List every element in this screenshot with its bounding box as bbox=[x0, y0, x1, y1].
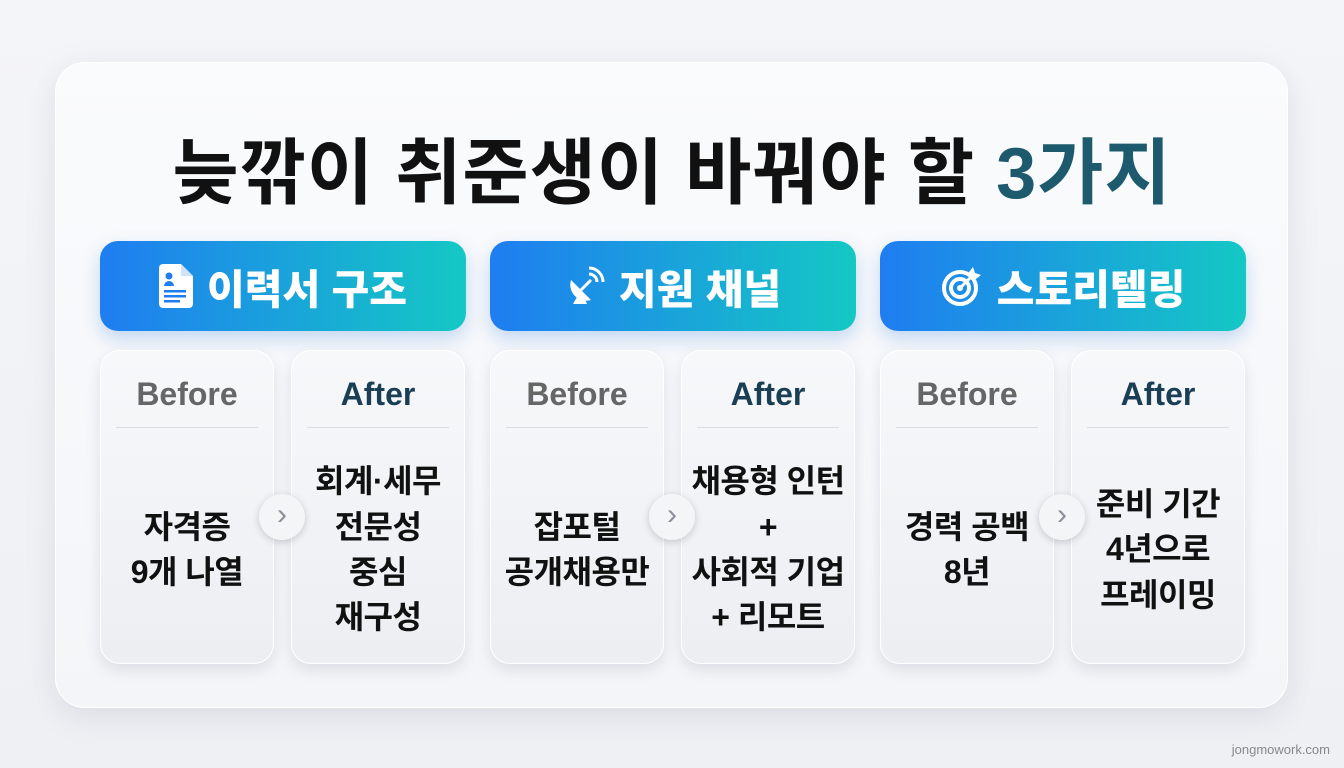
card: resume before: 9개 나열 bbox=[131, 554, 243, 590]
card: channel after: 사회적 기업 bbox=[691, 554, 845, 590]
arrow 1: › bbox=[277, 498, 287, 531]
arrow 3 bbox=[1039, 494, 1085, 540]
card: resume after: 전문성 bbox=[335, 509, 421, 545]
card: resume after bbox=[291, 350, 465, 664]
card: resume before: 자격증 bbox=[144, 509, 230, 545]
header: application channel bbox=[490, 241, 856, 331]
card: resume after: 회계·세무 bbox=[315, 463, 441, 499]
card: story after: 프레이밍 bbox=[1100, 577, 1216, 613]
card: resume before bbox=[100, 350, 274, 664]
card: story before: Before bbox=[916, 376, 1018, 412]
card: resume before: Before bbox=[136, 376, 238, 412]
header: storytelling bbox=[880, 241, 1246, 331]
header: resume structure bbox=[100, 241, 466, 331]
arrow 1 bbox=[259, 494, 305, 540]
card: channel before: Before bbox=[526, 376, 628, 412]
card: story before: 경력 공백 bbox=[905, 509, 1029, 545]
card: channel after: 채용형 인턴 bbox=[691, 463, 845, 499]
card: story after: After bbox=[1121, 376, 1195, 412]
card: channel after: + 리모트 bbox=[711, 599, 825, 635]
card: story after bbox=[1071, 350, 1245, 664]
card: resume after: 중심 bbox=[349, 554, 407, 590]
header: storytelling: 스토리텔링 bbox=[997, 267, 1185, 313]
card: story before bbox=[880, 350, 1054, 664]
background panel bbox=[55, 62, 1288, 708]
card: channel before: 잡포털 bbox=[534, 509, 620, 545]
card: story after: 4년으로 bbox=[1106, 531, 1210, 567]
card: channel after: + bbox=[759, 509, 777, 545]
card: story before: 8년 bbox=[944, 554, 990, 590]
card: resume after: 재구성 bbox=[335, 599, 421, 635]
card: channel after: After bbox=[731, 376, 805, 412]
header: application channel: 지원 채널 bbox=[619, 267, 781, 313]
card: channel before: 공개채용만 bbox=[505, 554, 649, 590]
arrow 3: › bbox=[1057, 498, 1067, 531]
card: channel after bbox=[681, 350, 855, 664]
header: resume structure: 이력서 구조 bbox=[207, 267, 407, 313]
watermark: jongmowork.com bbox=[1232, 742, 1330, 757]
arrow 2 bbox=[649, 494, 695, 540]
card: channel before bbox=[490, 350, 664, 664]
card: resume after: After bbox=[341, 376, 415, 412]
card: story after: 준비 기간 bbox=[1096, 486, 1220, 522]
title: 늦깎이 취준생이 바꿔야 할 3가지 bbox=[172, 134, 1172, 214]
arrow 2: › bbox=[667, 498, 677, 531]
